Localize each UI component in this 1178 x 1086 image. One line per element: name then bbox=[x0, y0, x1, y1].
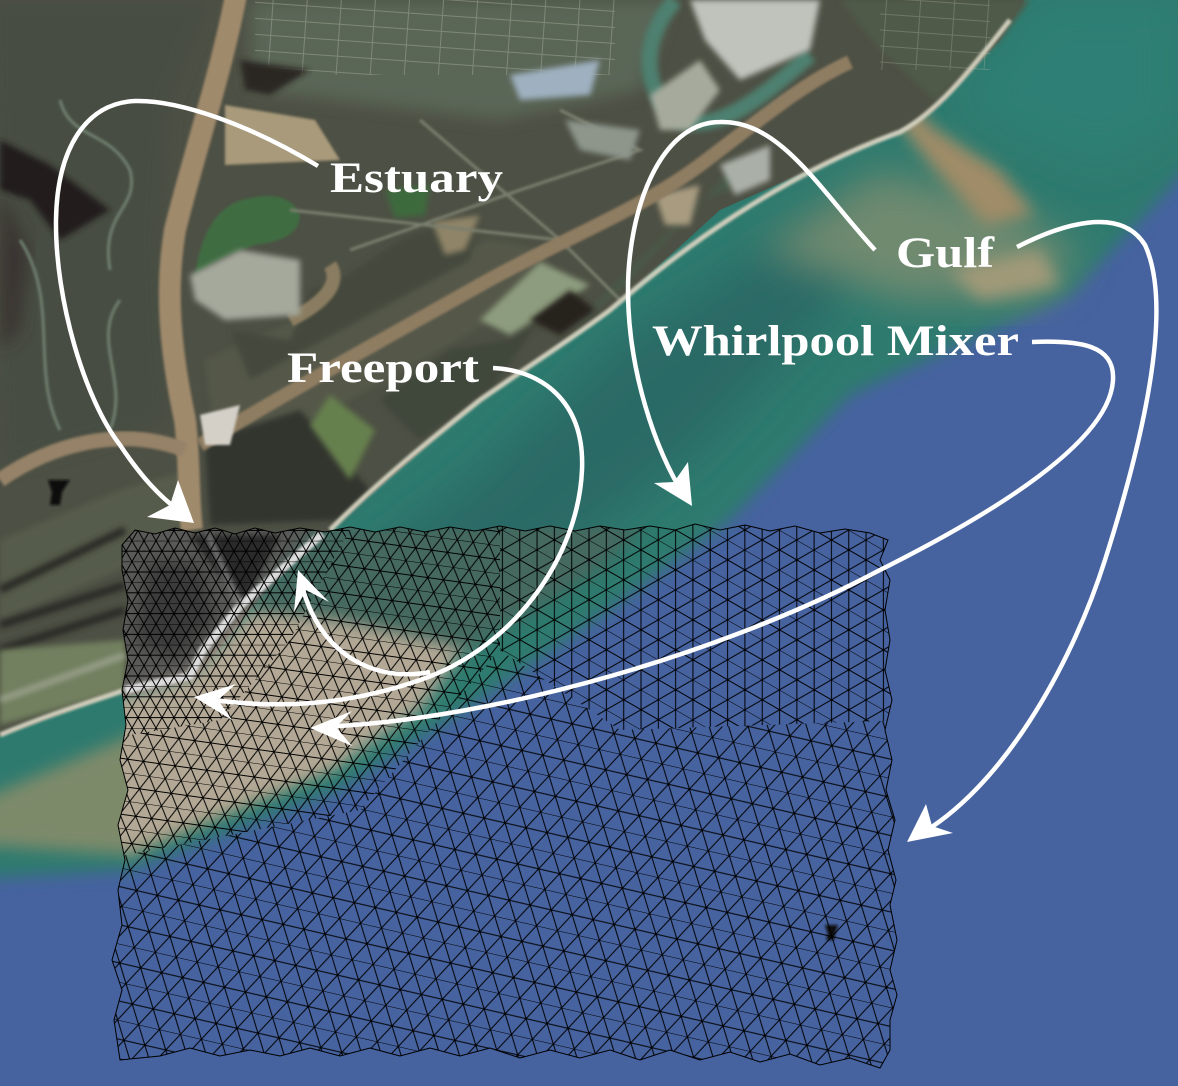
label: Freeport: Freeport bbox=[287, 345, 480, 392]
roads bbox=[290, 110, 640, 300]
label: Estuary: Estuary bbox=[330, 155, 504, 202]
arrow: Whirlpool Mixer to mesh bbox=[310, 342, 1113, 746]
beach line bbox=[0, 20, 1010, 735]
sediment plume: river mouth bbox=[760, 0, 1178, 300]
arrow: Gulf to coast bbox=[628, 122, 875, 506]
map pins bbox=[48, 480, 70, 505]
land bbox=[0, 0, 1030, 740]
mesh outline bbox=[112, 524, 897, 1068]
label: Gulf: Gulf bbox=[896, 230, 995, 277]
arrow: Gulf to open water bbox=[907, 222, 1156, 842]
facilities bbox=[190, 0, 820, 445]
arrow: Estuary to river mouth bbox=[56, 101, 318, 523]
label: Whirlpool Mixer: Whirlpool Mixer bbox=[652, 318, 1019, 365]
sediment plume: lower coast bbox=[0, 640, 400, 855]
mesh backdrop bbox=[105, 520, 650, 850]
mesh lines bbox=[100, 510, 910, 1080]
mesh: triangular grid overlay bbox=[100, 510, 910, 1080]
arrow: Freeport to mesh bbox=[194, 368, 582, 720]
waterways bbox=[0, 0, 850, 530]
